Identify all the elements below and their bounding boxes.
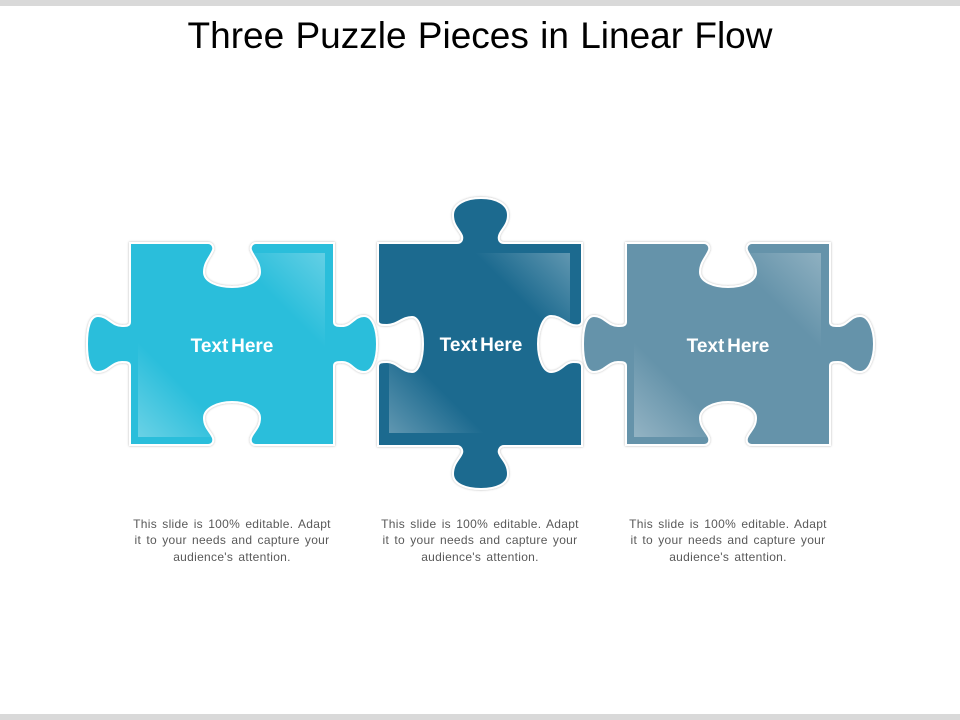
caption 2: it to your needs and capture your xyxy=(383,533,577,547)
piece 2 label: Text Here xyxy=(440,335,522,356)
caption 1 xyxy=(133,517,331,564)
piece 1 shape xyxy=(87,243,377,445)
piece 2 shape xyxy=(378,198,582,489)
title: Three Puzzle Pieces in Linear Flow xyxy=(188,15,773,56)
piece 3 bottom-left highlight xyxy=(634,342,729,437)
piece 2 bottom-left highlight xyxy=(389,364,472,433)
caption 2 xyxy=(381,517,579,564)
piece 1 bottom-left highlight xyxy=(138,342,233,437)
piece 1 top-right highlight xyxy=(230,253,325,348)
caption 3: This slide is 100% editable. Adapt xyxy=(629,517,827,531)
caption 1: audience's attention. xyxy=(173,550,291,564)
piece 3 label: Text Here xyxy=(687,336,769,357)
caption 1: This slide is 100% editable. Adapt xyxy=(133,517,331,531)
piece 3 top-right highlight xyxy=(726,253,821,348)
piece 3 shape xyxy=(583,243,874,445)
caption 3 xyxy=(629,517,827,564)
piece 2 top-right highlight xyxy=(486,253,570,322)
bottom grey bar xyxy=(0,714,960,720)
puzzle piece 2: dark blue xyxy=(378,198,582,489)
caption 3: audience's attention. xyxy=(669,550,787,564)
caption 3: it to your needs and capture your xyxy=(631,533,825,547)
caption 2: This slide is 100% editable. Adapt xyxy=(381,517,579,531)
caption 2: audience's attention. xyxy=(421,550,539,564)
top grey bar xyxy=(0,0,960,6)
caption 1: it to your needs and capture your xyxy=(135,533,329,547)
piece 1 label: Text Here xyxy=(191,336,273,357)
puzzle piece 1: cyan xyxy=(87,243,377,445)
puzzle piece 3: slate blue xyxy=(583,243,874,445)
